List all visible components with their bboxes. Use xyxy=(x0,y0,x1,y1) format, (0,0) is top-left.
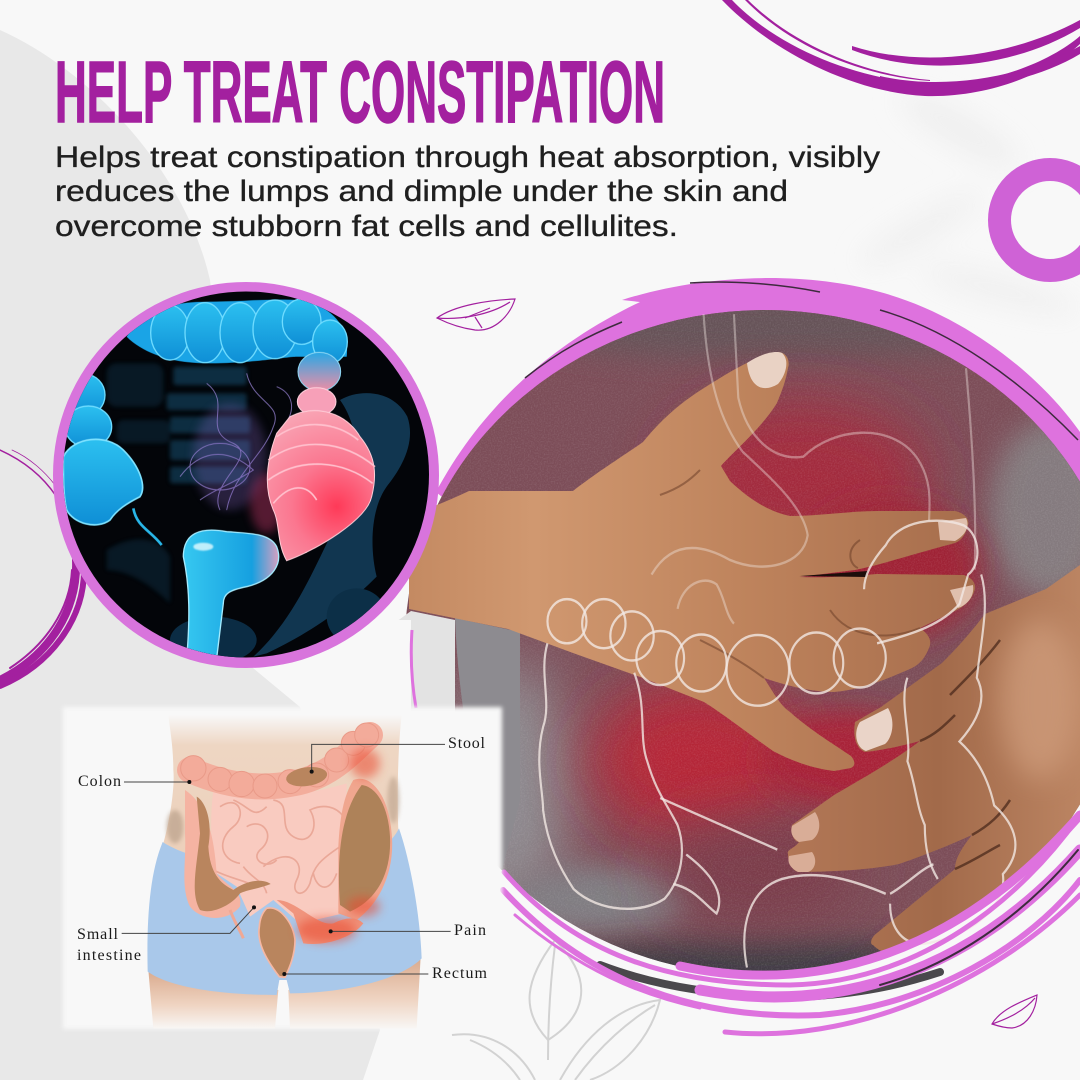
finger shadow lines xyxy=(920,640,1010,869)
description text: overcome stubborn fat cells and cellulites. xyxy=(55,210,678,243)
shirt side outside the ring xyxy=(455,618,520,870)
shirt colouring xyxy=(400,290,1080,1030)
pelvis bone xyxy=(253,393,410,657)
blue colon base xyxy=(127,300,347,363)
finger creases upper xyxy=(660,470,920,678)
big ring brush stroke bottom xyxy=(503,815,1080,1034)
description text: Helps treat constipation through heat absorption, visibly xyxy=(55,141,880,174)
left stool xyxy=(195,797,271,911)
cecum xyxy=(63,439,143,525)
legs xyxy=(148,970,278,1028)
colon descending joint xyxy=(298,352,341,391)
lower right hand xyxy=(788,565,1080,953)
diagram labels: Pain xyxy=(454,922,486,939)
left colon wall xyxy=(184,790,240,918)
small intestine xyxy=(211,783,347,923)
diagram labels: Colon xyxy=(78,773,121,790)
ring dark flecks xyxy=(525,282,1078,440)
grey leaves bottom xyxy=(452,940,660,1080)
panel: abdomen photo xyxy=(406,310,1080,971)
background grey shape xyxy=(0,30,380,1080)
lower pain colon xyxy=(277,900,363,944)
right colon xyxy=(338,779,392,920)
wall behind arm xyxy=(396,611,455,712)
decorative leaf top xyxy=(437,299,515,330)
pain glow xyxy=(297,748,380,943)
thin pink arc under arm xyxy=(411,630,416,708)
fingernails xyxy=(938,518,973,608)
thumbnail lower xyxy=(856,708,892,751)
big ring brush stroke top xyxy=(436,278,1080,520)
blue rectum segment xyxy=(183,530,279,658)
panel: anatomy diagram xyxy=(63,707,502,1029)
decorative leaf bottom right xyxy=(992,995,1037,1028)
leader dots xyxy=(187,770,333,976)
appendix xyxy=(133,508,162,545)
background leaf shadow xyxy=(853,81,1080,322)
x-ray artwork xyxy=(63,299,410,663)
right stool xyxy=(339,785,390,912)
appendix xyxy=(230,910,243,938)
torso xyxy=(163,715,402,867)
palm highlight xyxy=(1000,620,1080,780)
upper hand xyxy=(409,352,975,771)
rectum xyxy=(259,908,295,977)
thumbnail upper xyxy=(747,352,786,388)
diagram labels: Small xyxy=(77,926,119,943)
blue transverse colon xyxy=(151,299,347,363)
finger gap shadow xyxy=(800,571,868,577)
transverse colon segments xyxy=(181,723,379,798)
top stool xyxy=(285,765,328,789)
shirt xyxy=(405,310,1080,976)
intestine outline overlay xyxy=(539,314,1015,968)
transverse colon base xyxy=(190,735,370,786)
diagram labels: Stool xyxy=(448,735,486,752)
diagram background xyxy=(63,707,502,1029)
diagram labels: Rectum xyxy=(432,965,488,982)
panel: x-ray colon circle xyxy=(53,282,439,668)
spine xyxy=(107,363,250,603)
finger tip highlights xyxy=(788,812,819,872)
purple vessels xyxy=(180,373,292,510)
leader lines xyxy=(122,744,451,974)
ribs xyxy=(268,425,375,503)
left ascending colon xyxy=(65,374,112,447)
black disc xyxy=(63,292,429,658)
top-right brush swoosh xyxy=(722,0,1080,96)
diagram labels: intestine xyxy=(77,947,141,964)
description text: reduces the lumps and dimple under the skin and xyxy=(55,175,788,208)
white gap left of wall xyxy=(396,620,411,712)
description text xyxy=(55,141,880,243)
circle frame xyxy=(53,282,439,668)
diagram labels xyxy=(77,735,488,982)
blue briefs xyxy=(147,828,422,995)
purple ring decoration xyxy=(1000,170,1080,270)
left side brush swoosh xyxy=(0,450,84,686)
hair shade xyxy=(167,810,183,843)
swollen pink colon xyxy=(297,388,336,416)
